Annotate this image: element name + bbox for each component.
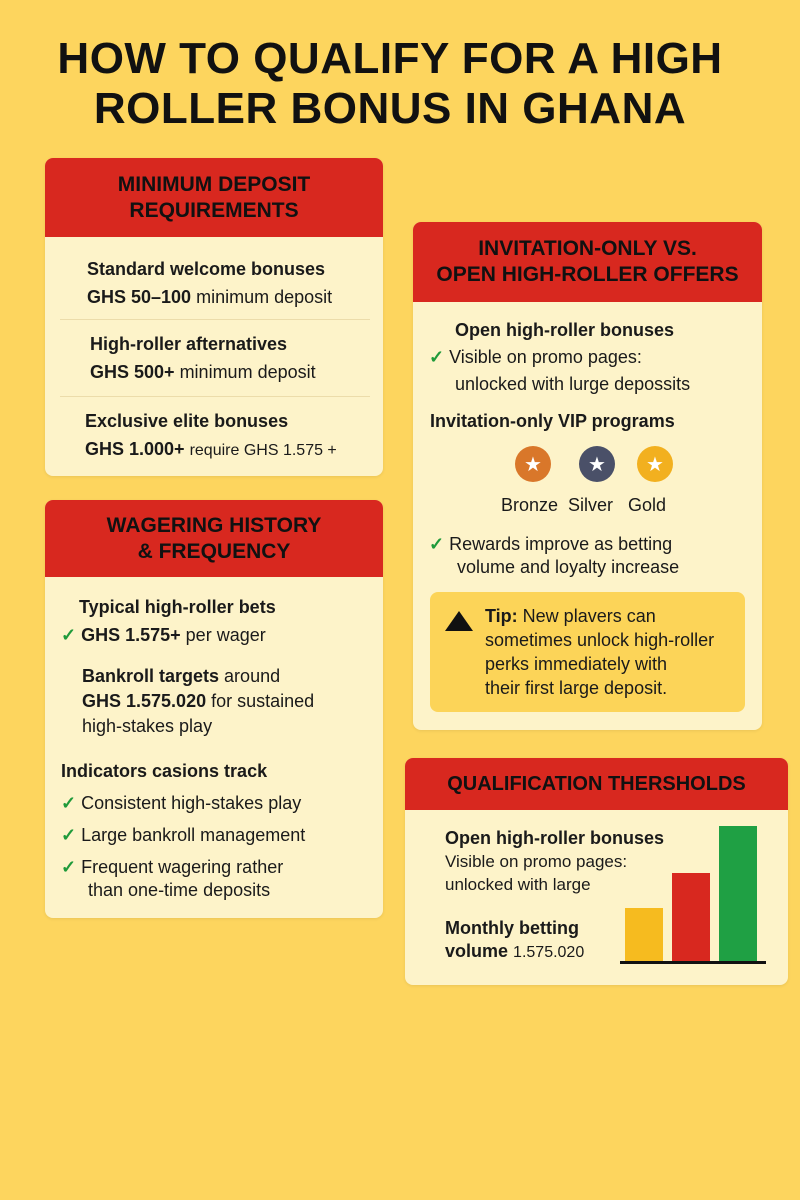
text: open bonuses: unlocked with large — [445, 875, 591, 894]
text: typical bets: Typical high-roller bets — [79, 597, 276, 617]
text: bankroll targets: high-stakes play — [82, 716, 212, 736]
heading: wagering history: & FREQUENCY — [138, 540, 290, 562]
text: indicators: ✓ Frequent wagering rather — [61, 857, 283, 877]
text: invitation-only VIP: Invitation-only VIP programs — [430, 411, 675, 431]
title: HOW TO QUALIFY FOR A HIGH — [57, 34, 723, 83]
callout: tip: Tip: New plavers can — [485, 606, 656, 626]
text: typical bets — [61, 597, 276, 645]
icons: tier medals: ★ — [524, 454, 542, 476]
text: bankroll targets: Bankroll targets around — [82, 666, 280, 686]
text: open bonuses: ✓ Visible on promo pages: — [429, 347, 642, 367]
heading: invitation-only: OPEN HIGH-ROLLER OFFERS — [436, 263, 739, 286]
heading: thresholds — [405, 758, 788, 810]
text: standard welcome bonuses: GHS 50–100 minimum deposit — [87, 287, 332, 307]
heading: minimum deposit — [45, 158, 383, 237]
text: rewards improve: volume and loyalty increase — [457, 557, 679, 577]
heading: minimum deposit: REQUIREMENTS — [129, 198, 299, 222]
text: rewards improve — [429, 534, 679, 577]
text: standard welcome bonuses: Standard welcome bonuses — [87, 259, 325, 279]
heading: invitation-only: INVITATION-ONLY VS. — [478, 237, 697, 260]
heading: minimum deposit: MINIMUM DEPOSIT — [118, 172, 310, 196]
text: indicators: ✓ Large bankroll management — [61, 825, 305, 845]
text: indicators — [61, 761, 306, 877]
text: standard welcome bonuses — [87, 259, 332, 307]
callout: tip: perks immediately with — [485, 654, 667, 674]
text: open bonuses — [445, 828, 664, 894]
title: ROLLER BONUS IN GHANA — [94, 84, 686, 133]
text: bankroll targets — [82, 666, 314, 736]
icons: tier medals — [515, 446, 673, 482]
icons: tier medals: ★ — [646, 454, 664, 476]
text: typical bets: ✓ GHS 1.575+ per wager — [61, 625, 266, 645]
panel: minimum deposit requirements — [45, 158, 383, 476]
callout: tip: their first large deposit. — [485, 678, 667, 698]
panel: wagering history: than one-time deposits — [88, 880, 270, 900]
panel: qualification thresholds — [405, 758, 788, 985]
text: indicators: ✓ Consistent high-stakes play — [61, 793, 301, 813]
text: open bonuses: Visible on promo pages: — [445, 852, 627, 871]
text: high-roller alternatives: High-roller afternatives — [90, 334, 287, 354]
panel: invitation-only vs open — [413, 222, 762, 730]
heading: wagering history: WAGERING HISTORY — [107, 514, 321, 536]
text: open bonuses: unlocked with lurge depossits — [455, 374, 690, 394]
text: bankroll targets: GHS 1.575.020 for sustained — [82, 691, 314, 711]
text: exclusive elite bonuses: Exclusive elite bonuses — [85, 411, 288, 431]
heading: invitation-only — [413, 222, 762, 302]
text: high-roller alternatives: GHS 500+ minimum deposit — [90, 362, 316, 382]
panel: wagering history — [45, 500, 383, 918]
text: monthly volume — [445, 918, 584, 961]
heading: wagering history — [45, 500, 383, 577]
text: open bonuses: Open high-roller bonuses — [445, 828, 664, 848]
text: monthly volume: Monthly betting — [445, 918, 579, 938]
title — [57, 34, 723, 133]
icons: tier medals: ★ — [588, 454, 606, 476]
callout: tip — [430, 592, 745, 712]
text: tier labels: Bronze Silver Gold — [501, 495, 666, 515]
chart: bars — [620, 826, 766, 964]
text: rewards improve: ✓ Rewards improve as betting — [429, 534, 672, 554]
callout: tip: sometimes unlock high-roller — [485, 630, 714, 650]
heading: thresholds: QUALIFICATION THERSHOLDS — [447, 773, 746, 795]
text: high-roller alternatives — [90, 334, 316, 382]
text: monthly volume: volume 1.575.020 — [445, 941, 584, 961]
text: indicators: Indicators casions track — [61, 761, 267, 781]
text: exclusive elite bonuses: GHS 1.000+ require GHS 1.575 + — [85, 439, 337, 459]
text: exclusive elite bonuses — [85, 411, 337, 459]
text: open bonuses: Open high-roller bonuses — [455, 320, 674, 340]
text: open bonuses — [429, 320, 690, 394]
